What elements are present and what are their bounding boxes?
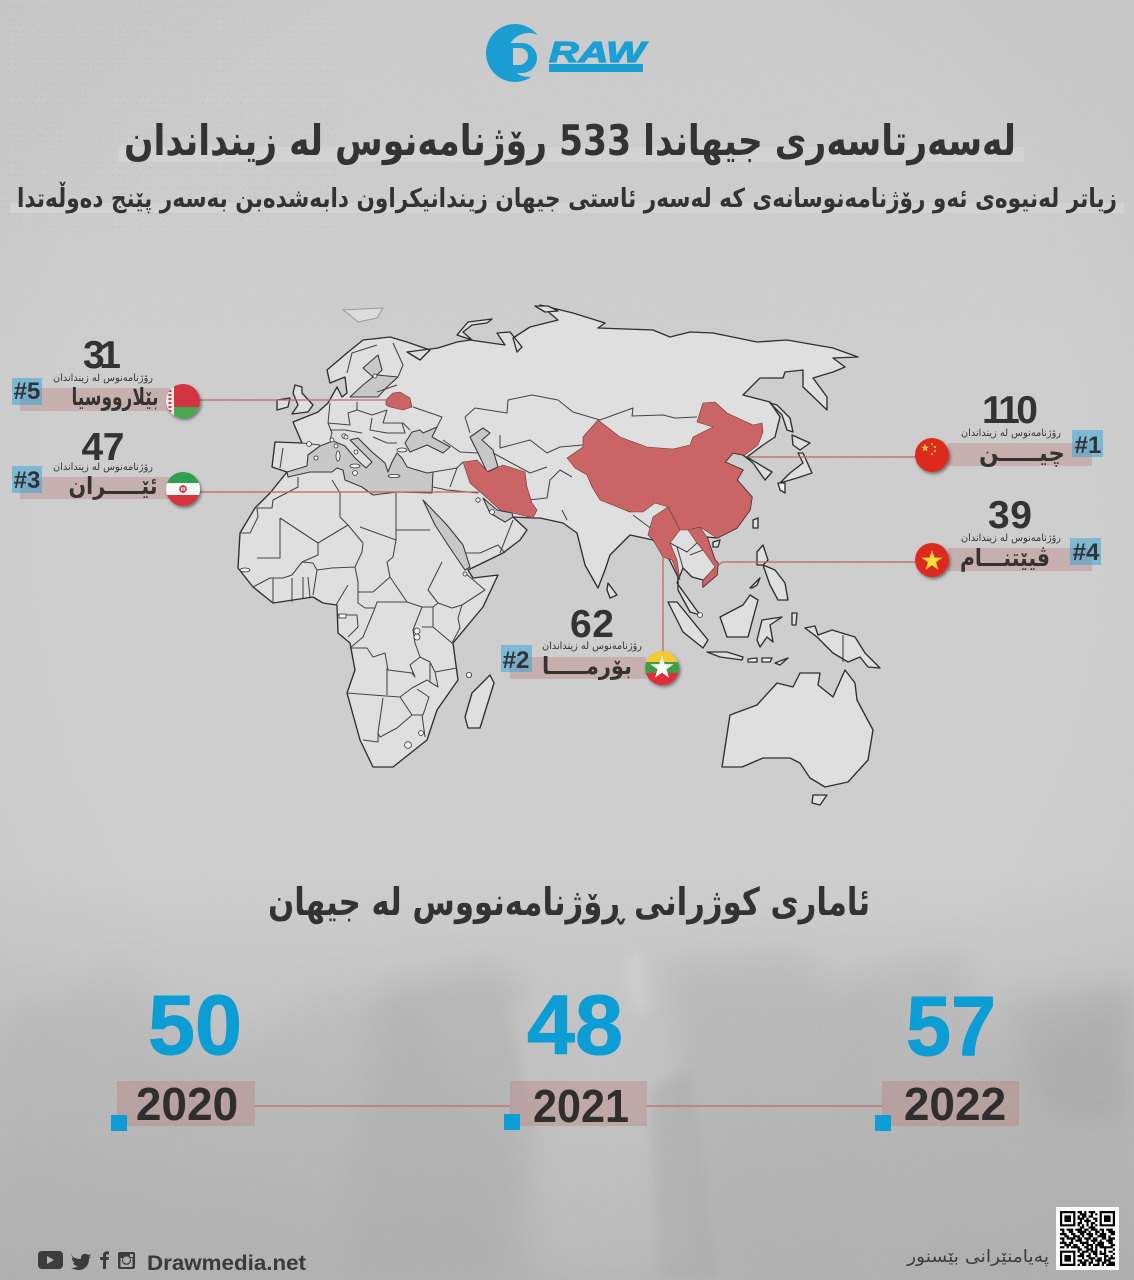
callout: Belarus: [12, 334, 387, 418]
highlighted country: Vietnam: [688, 527, 718, 587]
stat: 2022: [875, 979, 1019, 1131]
footer: publisher credit: پەیامنێرانی بێسنور: [906, 1247, 1049, 1267]
callout: Vietnam: [718, 494, 1101, 577]
stat: 2020: 2020: [136, 1078, 238, 1130]
world map: [238, 305, 880, 805]
highlighted country: Iran: [463, 460, 537, 518]
callout: Belarus: 31: [83, 334, 121, 377]
icon: Vietnam flag: [915, 543, 949, 577]
callout: Iran: ئێـــــران: [68, 472, 158, 500]
stat: 2022: 2022: [904, 1078, 1006, 1130]
stat: 2021: 48: [527, 978, 623, 1072]
callout: Vietnam: #4: [1073, 539, 1100, 566]
callout: China: #1: [1075, 432, 1101, 459]
logo: RAW: [549, 37, 649, 69]
callout: Vietnam: 39: [988, 494, 1032, 537]
callout: Iran: #3: [14, 467, 40, 494]
stat: 2020: 50: [148, 978, 242, 1072]
highlighted country: Burma: [648, 507, 680, 580]
land: Afro-Eurasia: [238, 305, 858, 767]
callout: Burma: 62: [570, 603, 614, 646]
stat: 2022: 57: [906, 979, 996, 1073]
timeline connector: [255, 1105, 882, 1107]
callout: Iran: رۆژنامەنوس لە زینداندان: [53, 462, 153, 473]
callout: China: چیـــــن: [979, 439, 1065, 467]
callout: Iran: [12, 426, 480, 506]
icon: Iran flag: [166, 472, 200, 506]
callout: Vietnam: ڤیێتنـــام: [960, 544, 1050, 572]
islands: [277, 306, 880, 805]
QR code: [1056, 1207, 1119, 1270]
callout: Burma: [501, 557, 679, 685]
highlighted country: China: [567, 402, 763, 538]
callout: China: [748, 389, 1103, 472]
stat: 2021: 2021: [533, 1080, 629, 1132]
callout: Belarus: بێلارووسیا: [72, 383, 158, 411]
callout: Burma: #2: [503, 647, 529, 674]
callout: Belarus: #5: [14, 378, 40, 405]
callout: Burma: بۆرمـــــا: [542, 652, 632, 680]
callout: China: 110: [982, 389, 1038, 432]
callout: China: رۆژنامەنوس لە زینداندان: [961, 428, 1061, 439]
footer: social icons: [38, 1251, 135, 1270]
icon: Burma flag: [645, 651, 679, 685]
callout: Vietnam: رۆژنامەنوس لە زینداندان: [961, 533, 1061, 544]
stat: 2020: [111, 978, 255, 1131]
icon: Belarus flag: [166, 384, 200, 418]
callout: Iran: 47: [82, 426, 124, 469]
callout: Burma: رۆژنامەنوس لە زینداندان: [542, 641, 642, 652]
logo: [486, 24, 649, 82]
highlighted country: Belarus: [386, 392, 412, 410]
callout: Belarus: رۆژنامەنوس لە زینداندان: [53, 373, 153, 384]
section heading: ئاماری کوژرانی ڕۆژنامەنووس لە جیهان: [268, 880, 870, 925]
inner seas: [287, 438, 433, 495]
country borders: [240, 343, 703, 742]
title: لەسەرتاسەری جیهاندا 533 رۆژنامەنوس لە زینداندان: [124, 116, 1016, 166]
lakes and small enclaves: [240, 374, 732, 748]
stat: 2021: [504, 978, 647, 1132]
icon: China flag: [915, 438, 949, 472]
footer: website: Drawmedia.net: [147, 1251, 306, 1275]
